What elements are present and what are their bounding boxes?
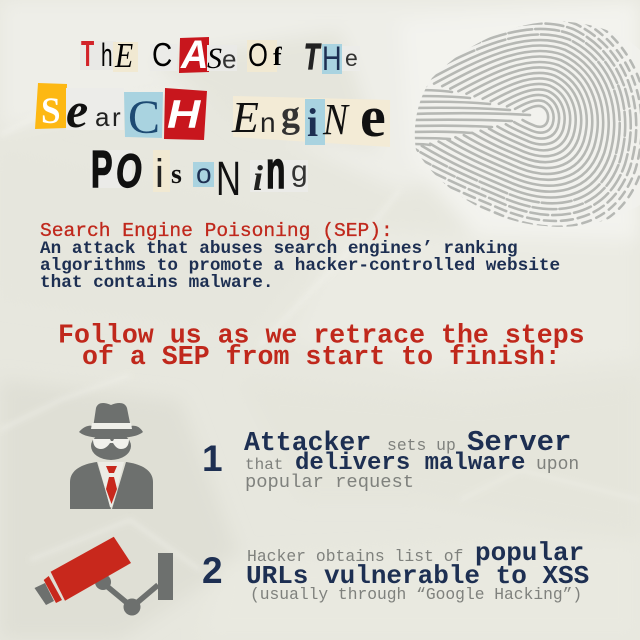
step 1 text: that (245, 456, 283, 474)
step 2 text: Hacker obtains list of (247, 547, 463, 566)
title line 2: e (360, 84, 386, 149)
step 1 text: delivers malware (295, 450, 525, 477)
title line 3: P (91, 141, 113, 199)
title line 3: o (196, 158, 212, 189)
title line 3: s (171, 159, 182, 190)
step 1 text: popular request (245, 471, 414, 493)
title line 3: i (253, 158, 263, 198)
title: ransom-note letters (35, 33, 390, 205)
title line 1: f (273, 42, 282, 71)
title line 2: e (66, 82, 88, 138)
step 2 text: URLs vulnerable to XSS (246, 561, 589, 591)
title line 1 (80, 33, 360, 78)
title line 3: i (155, 152, 164, 196)
title line 2: a (95, 102, 110, 132)
title line 3: O (116, 144, 142, 197)
title line 2: S (41, 90, 61, 131)
title line 3 (90, 141, 308, 205)
title line 2: r (112, 102, 121, 132)
step 2 number: 2 (202, 550, 223, 591)
step 1 number: 1 (202, 438, 223, 479)
title line 1: S (207, 42, 222, 75)
definition text block: An attack that abuses search engines’ ranking (40, 239, 518, 259)
step 1 text (244, 426, 579, 493)
step 1 text: upon (536, 455, 579, 475)
step 1 text: Attacker (244, 428, 371, 458)
title line 1: h (101, 38, 113, 73)
title line 2: C (128, 91, 160, 144)
title line 3: g (291, 155, 308, 188)
intro heading (58, 320, 585, 372)
title line 2: n (260, 107, 276, 138)
title line 2: g (281, 94, 300, 136)
title line 1: H (322, 39, 342, 78)
title line 1: e (345, 45, 358, 71)
definition text block (40, 220, 560, 293)
step 2 text: popular (475, 538, 584, 568)
step 2 text (246, 538, 589, 604)
title line 1: e (222, 44, 236, 74)
definition text block: Search Engine Poisoning (SEP): (40, 220, 393, 242)
step 2 text: (usually through “Google Hacking”) (250, 585, 582, 604)
title line 2: E (231, 93, 259, 142)
title line 1: T (304, 37, 322, 77)
definition text block: that contains malware. (40, 273, 274, 293)
title line 1: O (248, 38, 268, 74)
title line 2 (35, 82, 390, 149)
title line 1: T (81, 34, 94, 74)
title line 1: A (180, 33, 208, 77)
title line 3: N (216, 151, 241, 205)
step 1 text: sets up (387, 436, 456, 455)
definition text block: algorithms to promote a hacker-controlled website (40, 256, 560, 276)
step 1 text: Server (467, 426, 571, 459)
title line 3: n (266, 141, 285, 200)
icon: attacker in hat (70, 403, 153, 509)
icon: security camera (34, 537, 173, 616)
title line 2: N (322, 95, 350, 144)
title line 1: E (114, 37, 133, 76)
intro heading: Follow us as we retrace the steps (58, 320, 585, 350)
title line 2: i (307, 100, 318, 145)
intro heading: of a SEP from start to finish: (82, 342, 561, 372)
title line 2: H (167, 93, 201, 137)
icon: fingerprint (414, 22, 640, 227)
title line 1: C (152, 37, 172, 74)
